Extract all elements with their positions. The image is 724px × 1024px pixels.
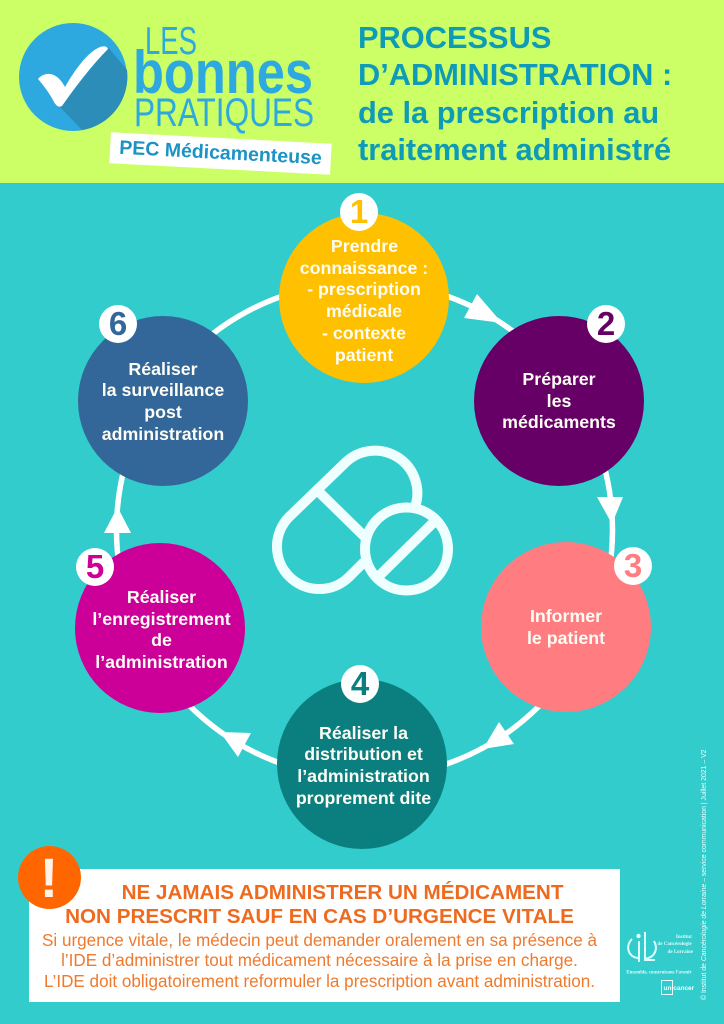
unicancer logo: unicancer	[664, 985, 695, 992]
icon: exclamation badge	[18, 846, 80, 908]
step 1: - prescription	[307, 279, 421, 299]
step 2: les	[547, 391, 571, 411]
badge 2: 2	[597, 305, 615, 342]
warning panel	[29, 869, 620, 1002]
arrow: step 2 to 3	[597, 497, 623, 524]
title: PROCESSUS	[358, 20, 551, 54]
arrow: step 1 to 2	[464, 294, 502, 323]
institute logo	[626, 932, 695, 995]
warning body text: L’IDE doit obligatoirement reformuler la prescription avant administration.	[44, 972, 595, 991]
title	[358, 20, 672, 167]
step 5: l’administration	[95, 652, 228, 672]
badge 3: 3	[624, 547, 642, 584]
step 4: l’administration	[297, 766, 430, 786]
institute name: de Lorraine	[668, 950, 694, 955]
icon: exclamation badge: !	[40, 846, 58, 908]
badge 1: 1	[350, 193, 368, 230]
step 6: post	[144, 402, 182, 422]
logo wordmark: bonnes	[133, 39, 313, 106]
step 3: Informer	[530, 606, 602, 626]
badge 4	[341, 665, 379, 703]
institute tagline: Ensemble, construisons l’avenir	[626, 970, 692, 976]
ring	[116, 282, 612, 778]
logo wordmark	[133, 20, 314, 135]
warning body text: Si urgence vitale, le médecin peut demander oralement en sa présence à	[42, 930, 597, 950]
step 4	[277, 679, 447, 849]
logo wordmark: LES	[145, 20, 197, 63]
process cycle ring and arrows	[104, 294, 623, 767]
step 4: proprement dite	[296, 788, 431, 808]
step 6: la surveillance	[102, 380, 224, 400]
step 5: de	[151, 630, 172, 650]
header band	[0, 0, 724, 183]
icon: check mark badge	[19, 23, 127, 131]
warning heading: NE JAMAIS ADMINISTRER UN MÉDICAMENT	[122, 881, 563, 904]
step 1: Prendre	[331, 236, 398, 256]
label: PEC Médicamenteuse: PEC Médicamenteuse	[119, 137, 322, 169]
step 6: administration	[102, 424, 224, 444]
arrow: step 3 to 4	[483, 722, 514, 749]
step 5	[75, 543, 245, 713]
badge 5	[76, 548, 114, 586]
title: D’ADMINISTRATION :	[358, 57, 672, 92]
badge 1	[340, 193, 378, 231]
step 3: le patient	[527, 628, 605, 648]
institute name: de Cancérologie	[658, 942, 693, 947]
arrow: step 4 to 5	[220, 732, 251, 757]
step 6	[78, 316, 248, 486]
step 4: Réaliser la	[319, 722, 408, 742]
logo: les bonnes pratiques	[19, 20, 314, 135]
step 3	[481, 542, 651, 712]
warning body text	[42, 930, 597, 991]
badge 3	[614, 547, 652, 585]
warning heading	[65, 881, 574, 928]
title: de la prescription au	[358, 94, 659, 130]
step 2: médicaments	[502, 412, 616, 432]
institute name: Institut	[676, 935, 692, 940]
icon: ILC mark	[628, 932, 656, 962]
step 1: connaissance :	[300, 258, 428, 278]
arrow: step 5 to 6	[104, 507, 131, 533]
title: traitement administré	[358, 132, 671, 167]
step 1	[279, 213, 449, 383]
copyright vertical text: © Institut de Cancérologie de Lorraine – service communication | Juillet 2021 – V2	[701, 750, 708, 1000]
step 1: patient	[335, 345, 393, 365]
step 6: Réaliser	[128, 358, 198, 378]
badge 6	[99, 305, 137, 343]
warning heading: NON PRESCRIT SAUF EN CAS D’URGENCE VITALE	[65, 905, 574, 928]
step 2	[474, 316, 644, 486]
badge 6: 6	[109, 305, 127, 342]
badge 2	[587, 305, 625, 343]
step 2: Préparer	[522, 369, 596, 389]
badge 5: 5	[86, 548, 104, 585]
step 1: - contexte	[322, 323, 406, 343]
step 5: l’enregistrement	[92, 609, 231, 629]
badge 4: 4	[351, 665, 369, 702]
step 4: distribution et	[304, 744, 423, 764]
warning body text: l’IDE d’administrer tout médicament nécessaire à la prise en charge.	[61, 951, 578, 970]
icon: pills	[277, 451, 448, 590]
step 1: médicale	[326, 301, 402, 321]
step 5: Réaliser	[127, 587, 196, 607]
